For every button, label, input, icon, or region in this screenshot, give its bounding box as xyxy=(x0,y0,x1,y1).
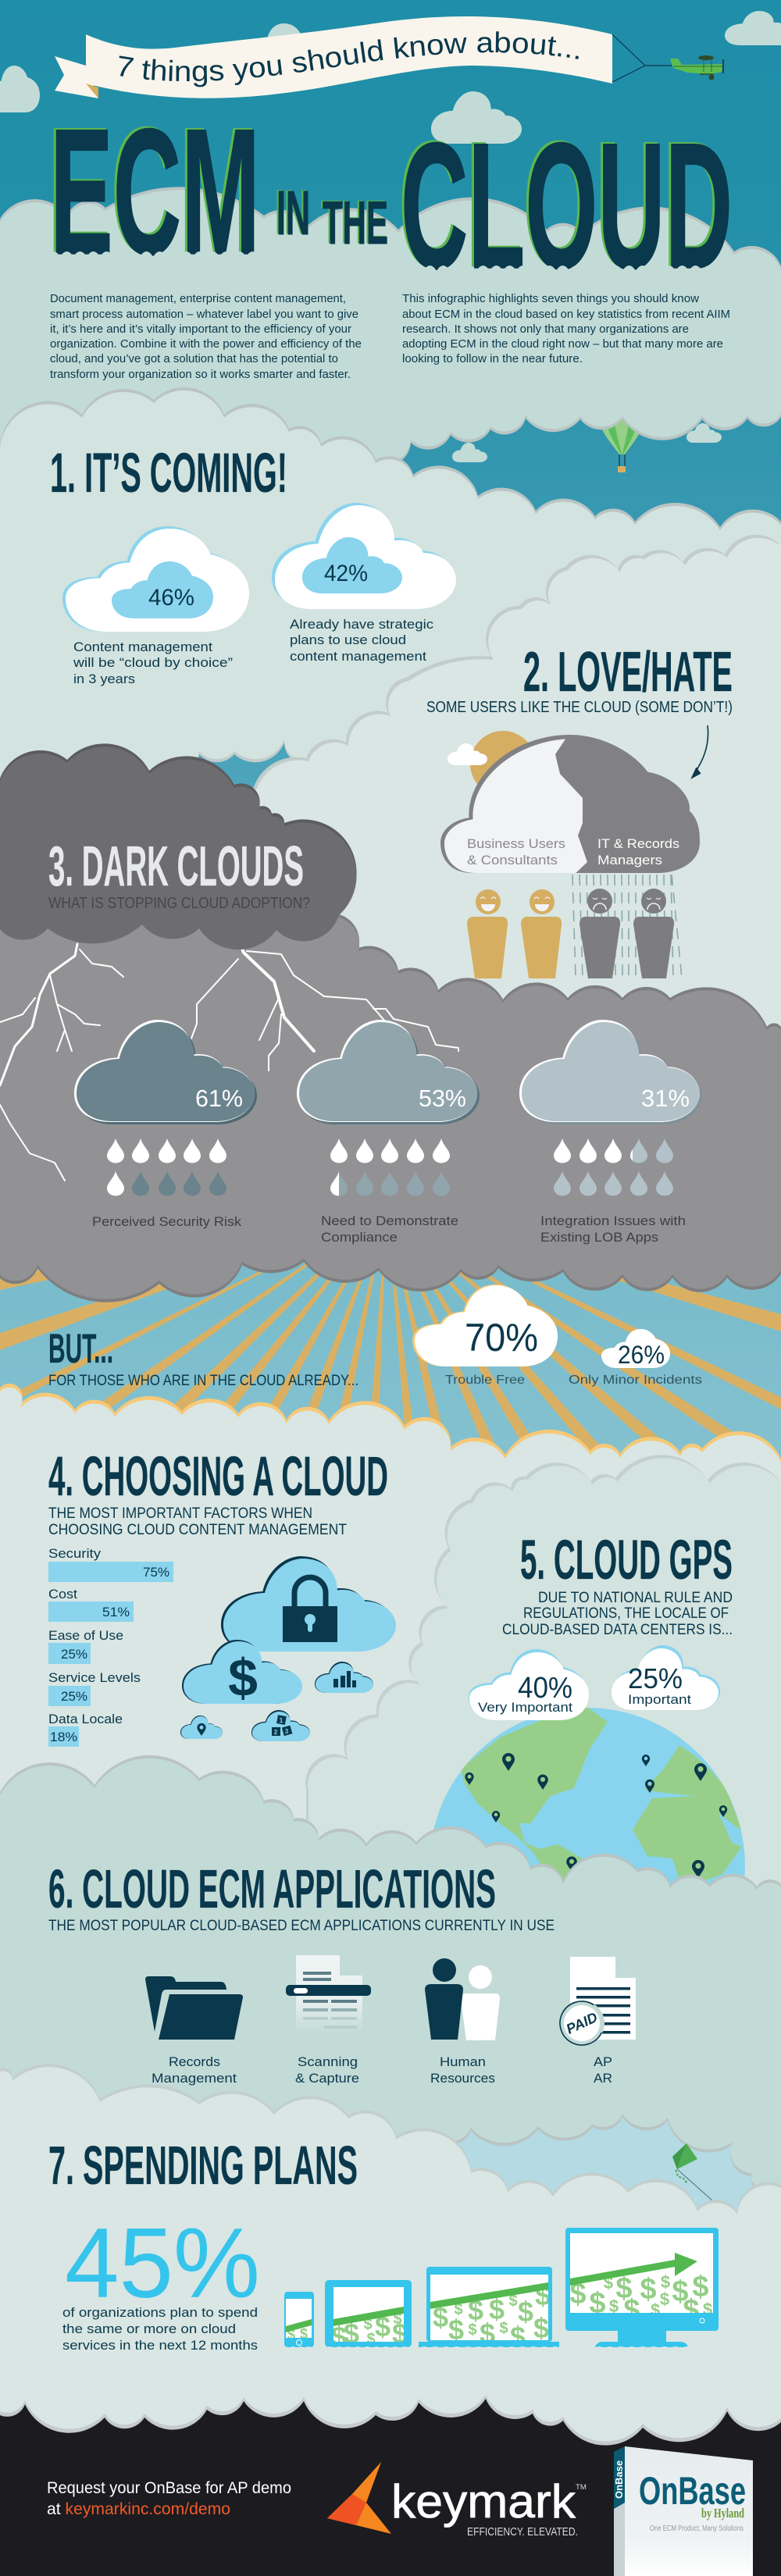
icon: dollar cloud: $ xyxy=(228,1648,258,1708)
sun ray sky xyxy=(0,1171,781,1484)
bar chart: 25% xyxy=(61,1647,87,1662)
icon: numbers cloud: 1 xyxy=(280,1717,284,1724)
keymark logo: keymark xyxy=(391,2475,576,2528)
bar chart: 18% xyxy=(50,1730,77,1744)
trees in sky gap xyxy=(264,770,278,796)
intro text left: smart process automation – whatever label you want to give xyxy=(50,308,358,321)
call to action xyxy=(47,2479,291,2518)
icon: monitor: $ xyxy=(703,2300,712,2319)
icon: laptop: $ xyxy=(468,2321,477,2339)
title xyxy=(47,91,742,306)
icon: folder xyxy=(145,1976,243,2040)
panel: section 7 cloud xyxy=(0,2054,781,2442)
icon: monitor: $ xyxy=(640,2273,657,2306)
subheading 5: DUE TO NATIONAL RULE AND xyxy=(538,1590,733,1606)
bar chart: Security xyxy=(48,1546,102,1561)
cloud stat 42% xyxy=(272,503,456,609)
stat 70%: 70% xyxy=(465,1316,538,1359)
storm labels xyxy=(92,1213,686,1245)
app labels xyxy=(152,2054,612,2086)
app labels: Scanning xyxy=(298,2054,358,2069)
storm labels: Existing LOB Apps xyxy=(540,1230,658,1245)
bar chart: 25% xyxy=(61,1689,87,1704)
bar chart: Service Levels xyxy=(48,1670,141,1685)
intro text right: about ECM in the cloud based on key statistics from recent AIIM xyxy=(402,308,730,321)
icon: phone: $ xyxy=(287,2327,295,2343)
subheading 6: THE MOST POPULAR CLOUD-BASED ECM APPLICATIONS CURRENTLY IN USE xyxy=(48,1918,555,1934)
label 46% xyxy=(73,640,233,686)
sun rays xyxy=(0,1209,781,1484)
icon: monitor: $ xyxy=(683,2294,700,2327)
app labels: Human xyxy=(440,2054,486,2069)
icon: phone: $ xyxy=(300,2326,308,2342)
intro text right xyxy=(402,292,730,365)
icon: numbers cloud: 2 xyxy=(274,1729,278,1736)
app labels: Management xyxy=(152,2071,237,2086)
banner fold xyxy=(86,84,98,98)
storm stat 61% xyxy=(74,1020,257,1196)
icon: paid document xyxy=(554,1957,636,2051)
label 42%: content management xyxy=(290,649,426,664)
stat 26% xyxy=(601,1329,670,1369)
storm labels: Need to Demonstrate xyxy=(321,1213,458,1228)
subheading 4 xyxy=(48,1505,347,1538)
icon: tablet: $ xyxy=(375,2311,390,2343)
panel: section 4 cloud xyxy=(0,1388,781,1890)
icon: tablet: $ xyxy=(363,2316,373,2333)
sky patch xyxy=(438,2114,762,2268)
panel: section 5 cloud xyxy=(305,1455,779,1885)
icon: pin cloud xyxy=(180,1716,223,1739)
big stat 45%: 45% xyxy=(65,2207,260,2318)
storm stat 31%: 31% xyxy=(641,1085,690,1112)
heading 3: 3. DARK CLOUDS xyxy=(48,836,304,898)
label 46%: Content management xyxy=(73,640,212,654)
intro text right: looking to follow in the near future. xyxy=(402,352,583,365)
icon: monitor: $ xyxy=(615,2272,633,2305)
intro text left xyxy=(50,292,362,381)
icon: laptop: $ xyxy=(510,2321,526,2353)
top large cloud xyxy=(0,190,781,469)
bar chart xyxy=(48,1546,173,1747)
icon: monitor xyxy=(565,2228,719,2347)
icon: monitor: $ xyxy=(660,2289,669,2309)
intro text right: adopting ECM in the cloud right now – but that many more are xyxy=(402,337,723,351)
app labels: & Capture xyxy=(295,2071,359,2086)
intro text right: This infographic highlights seven things you should know xyxy=(402,292,699,305)
label 46%: will be “cloud by choice” xyxy=(73,655,233,670)
icon: laptop: $ xyxy=(448,2314,464,2346)
call to action: Request your OnBase for AP demo xyxy=(47,2479,291,2497)
icon: monitor: $ xyxy=(672,2275,689,2308)
bar chart: 51% xyxy=(102,1605,130,1619)
app labels: Resources xyxy=(430,2071,495,2086)
dark heading cloud xyxy=(0,746,357,950)
subheading 2: SOME USERS LIKE THE CLOUD (SOME DON’T!) xyxy=(426,699,733,716)
heading BUT: BUT... xyxy=(48,1326,113,1372)
icon: lock cloud xyxy=(221,1556,396,1651)
footer background xyxy=(0,2382,781,2576)
icon: tablet: $ xyxy=(393,2311,402,2328)
storm labels: Integration Issues with xyxy=(540,1213,686,1228)
app labels: AR xyxy=(594,2071,612,2086)
icon: tablet: $ xyxy=(366,2331,376,2348)
stat 25%: 25% xyxy=(628,1662,683,1694)
intro text left: transform your organization so it works smarter and faster. xyxy=(50,368,351,381)
banner xyxy=(55,16,672,98)
storm stat 53%: 53% xyxy=(419,1085,466,1112)
labels trouble free: Trouble Free xyxy=(445,1374,525,1387)
stat description xyxy=(62,2305,258,2353)
icon: tablet: $ xyxy=(392,2318,408,2350)
icon: monitor: $ xyxy=(609,2296,619,2316)
stat 25%: Important xyxy=(628,1692,691,1707)
person sad 2 xyxy=(633,889,674,978)
icon: phone xyxy=(284,2292,314,2347)
title word IN: IN xyxy=(276,178,310,248)
icon: numbers cloud: 3 xyxy=(285,1728,289,1735)
icon: numbers cloud xyxy=(251,1710,310,1741)
intro text left: cloud, and you’ve got a solution that has the potential to xyxy=(50,352,338,365)
stat 40%: Very Important xyxy=(478,1700,572,1715)
cloud stat 46%: 46% xyxy=(148,585,194,611)
person happy 1 xyxy=(467,889,508,978)
small white cloud xyxy=(448,743,487,765)
stat description: services in the next 12 months xyxy=(62,2338,258,2353)
love hate cloud xyxy=(440,735,704,873)
rain xyxy=(572,875,682,978)
person happy 2 xyxy=(521,889,562,978)
icon: laptop xyxy=(419,2267,559,2353)
label IT: Managers xyxy=(597,853,662,868)
icon: laptop: $ xyxy=(499,2320,508,2337)
top sky clouds xyxy=(0,11,781,144)
tow lines xyxy=(612,34,672,82)
storm labels: Compliance xyxy=(321,1230,398,1245)
subheading 4: CHOOSING CLOUD CONTENT MANAGEMENT xyxy=(48,1522,347,1538)
stat 70% xyxy=(412,1284,558,1366)
intro text left: organization. Combine it with the power and efficiency of the xyxy=(50,337,362,351)
sun xyxy=(470,731,536,796)
label business users xyxy=(467,836,565,868)
stat 25% xyxy=(612,1645,720,1710)
app labels: Records xyxy=(169,2054,220,2069)
stat 26%: 26% xyxy=(618,1341,665,1369)
icon: monitor: $ xyxy=(692,2271,709,2303)
storm stat 31% xyxy=(519,1020,702,1196)
call to action: at keymarkinc.com/demo xyxy=(47,2500,230,2518)
bar chart: 75% xyxy=(143,1565,169,1580)
icon: laptop: $ xyxy=(518,2296,533,2328)
label 42%: plans to use cloud xyxy=(290,632,406,647)
intro text left: it, it’s here and it’s vitally important to the efficiency of your xyxy=(50,322,351,336)
icon: laptop: $ xyxy=(535,2279,551,2311)
icon: monitor: $ xyxy=(589,2287,606,2320)
labels trouble free: Only Minor Incidents xyxy=(569,1374,702,1387)
title word THE: THE xyxy=(323,188,388,257)
OnBase product box xyxy=(613,2446,753,2576)
app labels: AP xyxy=(594,2054,612,2069)
panel: section 6 cloud xyxy=(0,1758,781,2343)
hot air balloon xyxy=(599,390,644,472)
OnBase product box: by Hyland xyxy=(701,2506,744,2521)
intro text right: research. It shows not only that many organizations are xyxy=(402,322,689,336)
icon: laptop: $ xyxy=(480,2318,495,2350)
heading 7: 7. SPENDING PLANS xyxy=(48,2135,358,2196)
icon: tablet: $ xyxy=(331,2321,347,2353)
icon: laptop: $ xyxy=(454,2301,463,2318)
icon: laptop: $ xyxy=(489,2293,505,2325)
stat description: of organizations plan to spend xyxy=(62,2305,258,2320)
label IT xyxy=(597,836,679,868)
plane xyxy=(670,55,724,80)
icon: monitor: $ xyxy=(661,2272,670,2292)
label business users: & Consultants xyxy=(467,853,558,868)
label business users: Business Users xyxy=(467,836,565,851)
icon: kite xyxy=(672,2143,712,2200)
label 42%: Already have strategic xyxy=(290,617,434,632)
small clouds in gap xyxy=(452,423,722,462)
stat 40% xyxy=(469,1649,589,1720)
icon: chart cloud xyxy=(315,1662,373,1693)
banner text: 7 things you should know about... xyxy=(119,31,579,87)
label 42% xyxy=(290,617,434,664)
subheading 5: CLOUD-BASED DATA CENTERS IS... xyxy=(502,1622,733,1638)
storm stat 53% xyxy=(297,1020,480,1196)
icon: laptop: $ xyxy=(433,2301,448,2333)
icon: laptop: $ xyxy=(468,2294,483,2326)
icon: monitor: $ xyxy=(623,2294,640,2327)
bar chart: Cost xyxy=(48,1587,77,1602)
globe xyxy=(434,1708,745,1885)
icon: tablet xyxy=(325,2280,412,2353)
title word ECM: ECM xyxy=(50,91,260,292)
stat 40%: 40% xyxy=(518,1672,572,1705)
icon: scanner xyxy=(286,1955,371,2033)
keymark logo xyxy=(327,2462,587,2539)
icon: paid document: PAID xyxy=(564,2009,600,2037)
icon: laptop: $ xyxy=(533,2312,549,2344)
storm stat 61%: 61% xyxy=(195,1085,243,1112)
subheading 4: THE MOST IMPORTANT FACTORS WHEN xyxy=(48,1505,312,1522)
heading 1: 1. IT’S COMING! xyxy=(50,443,287,504)
icon: dollar cloud xyxy=(182,1640,302,1708)
subheading 5 xyxy=(502,1590,733,1638)
icon: laptop: $ xyxy=(508,2293,518,2310)
subheading BUT: FOR THOSE WHO ARE IN THE CLOUD ALREADY... xyxy=(48,1373,358,1389)
subheading 3: WHAT IS STOPPING CLOUD ADOPTION? xyxy=(48,895,310,912)
storm labels: Perceived Security Risk xyxy=(92,1214,242,1229)
labels trouble free xyxy=(445,1374,702,1387)
icon: monitor: $ xyxy=(604,2273,613,2293)
storm cloud: grey xyxy=(0,917,781,1299)
keymark logo: TM xyxy=(576,2483,587,2491)
bar chart: Data Locale xyxy=(48,1712,123,1726)
bar chart: Ease of Use xyxy=(48,1628,123,1643)
lightning xyxy=(0,939,458,1181)
icon: monitor: $ xyxy=(569,2278,587,2311)
icon: tablet: $ xyxy=(344,2318,359,2350)
label 46%: in 3 years xyxy=(73,672,135,686)
banner cloth xyxy=(86,16,612,98)
panel: section 2 cloud xyxy=(253,538,781,1031)
label IT: IT & Records xyxy=(597,836,679,851)
intro text left: Document management, enterprise content management, xyxy=(50,292,346,305)
banner tail xyxy=(55,56,98,98)
heading 4: 4. CHOOSING A CLOUD xyxy=(48,1446,388,1508)
sky background xyxy=(0,0,781,859)
OnBase product box: OnBase xyxy=(613,2460,625,2499)
cloud stat 46% xyxy=(62,526,249,632)
keymark logo: EFFICIENCY. ELEVATED. xyxy=(467,2525,578,2539)
icon: monitor: $ xyxy=(651,2300,660,2320)
OnBase product box: One ECM Product, Many Solutions xyxy=(650,2524,744,2533)
panel: section 1 cloud xyxy=(0,390,781,781)
icon: people xyxy=(425,1958,500,2040)
person sad 1 xyxy=(580,889,620,978)
arrow xyxy=(692,725,708,778)
cloud stat 42%: 42% xyxy=(324,561,368,586)
subheading 5: REGULATIONS, THE LOCALE OF xyxy=(523,1605,729,1622)
stat description: the same or more on cloud xyxy=(62,2321,236,2336)
